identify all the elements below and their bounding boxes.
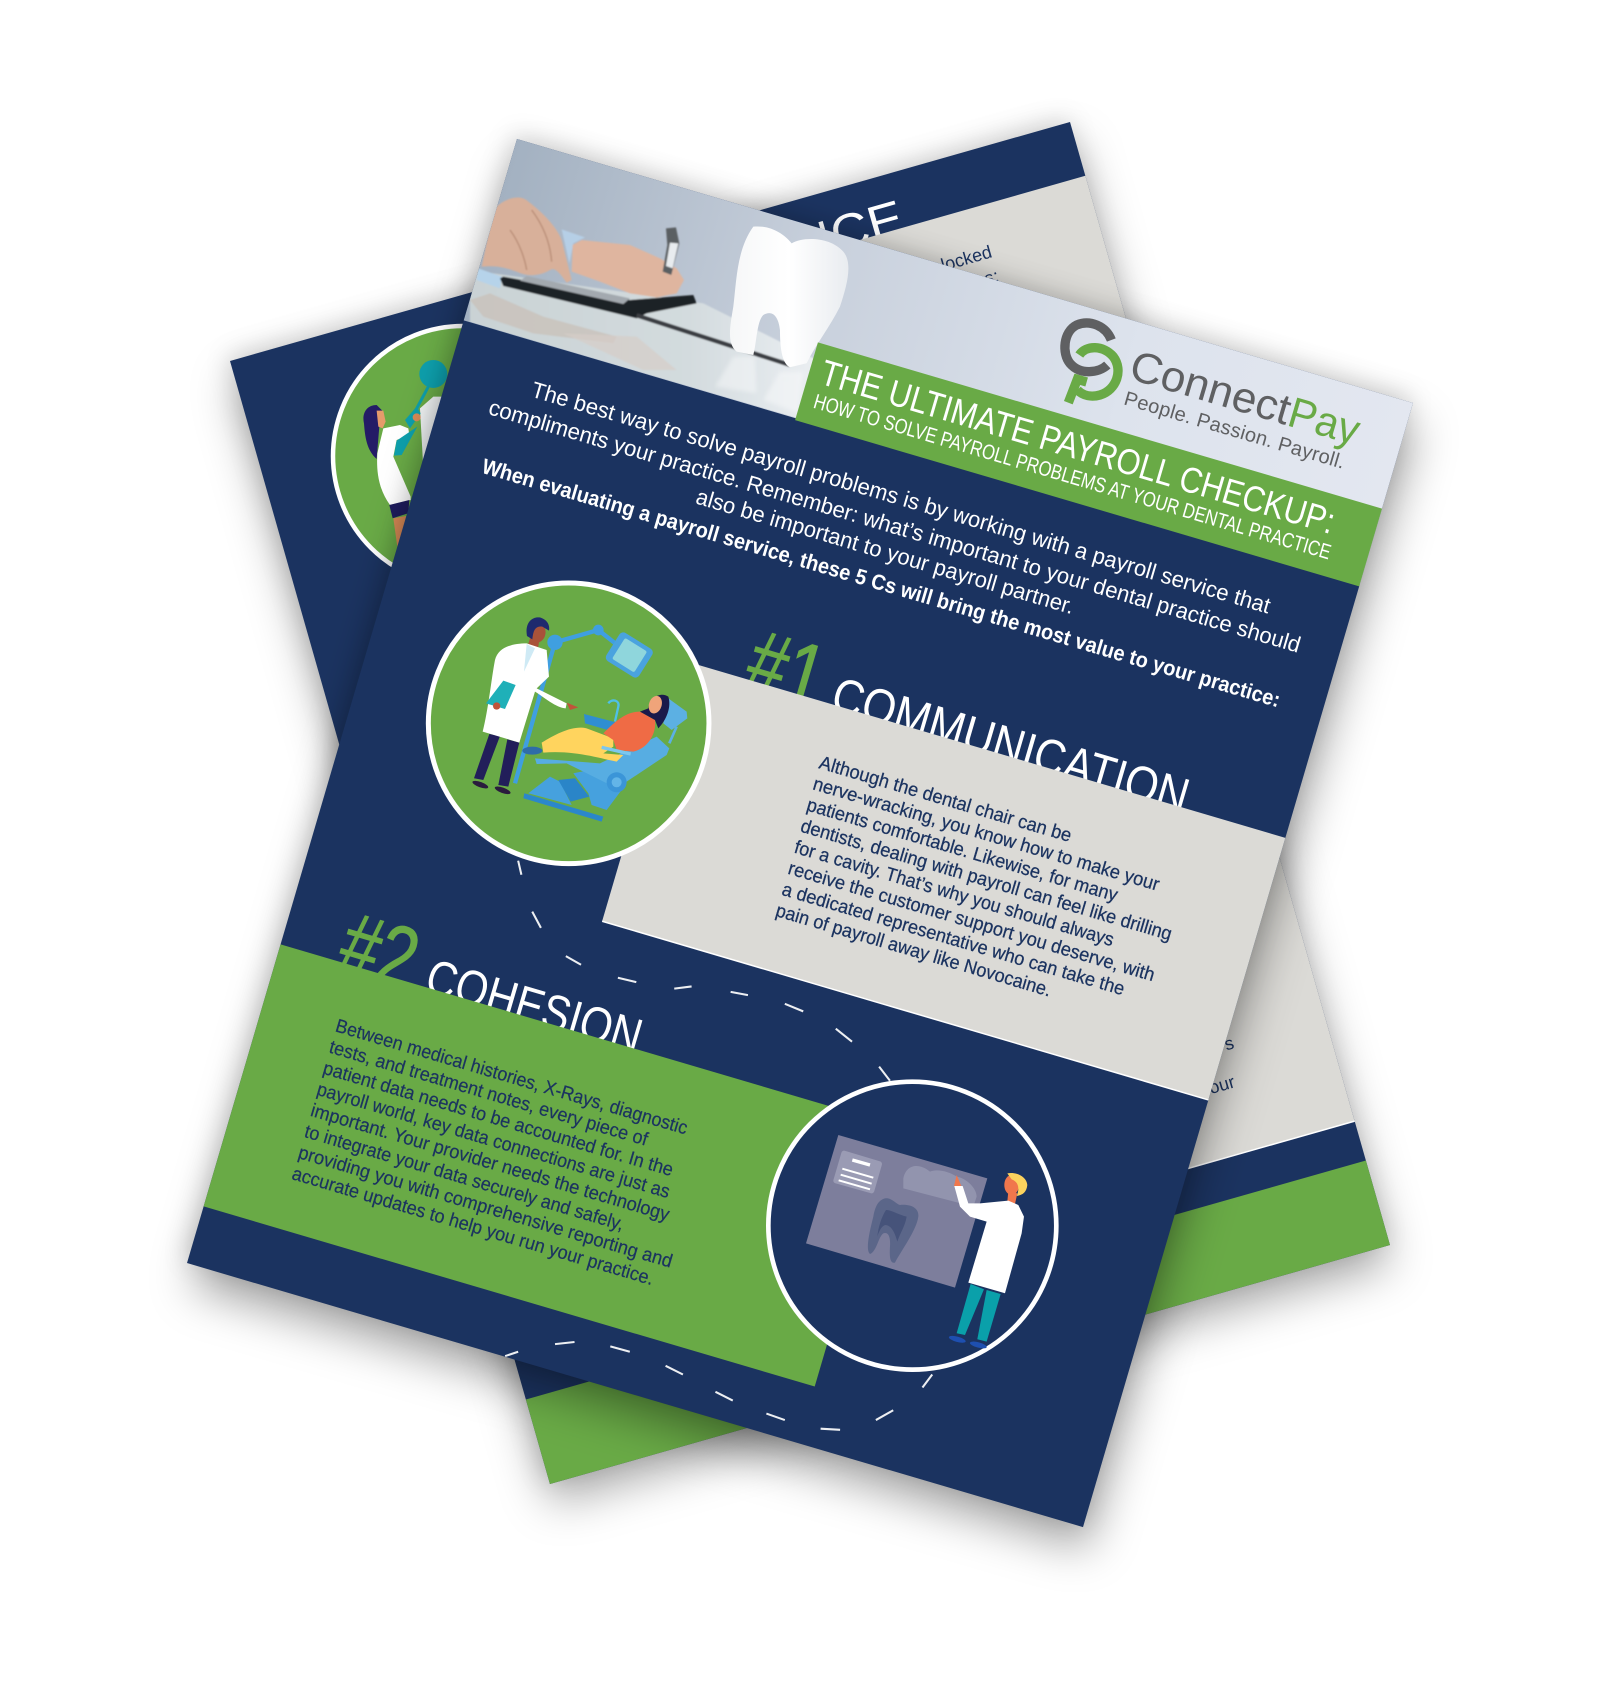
table and hands [470,197,814,418]
title band [795,342,1382,586]
x-ray board [806,1135,987,1288]
back sheet [230,122,1390,1484]
cohesion body text [290,1016,712,1294]
cohesion body text: important. Your provider needs the technology [308,1100,672,1226]
communication body text: dentists, dealing with payroll can feel like drilling [798,816,1174,945]
cohesion body text: accurate updates to help you run your practice. [290,1164,656,1290]
heading number 2: #2 [329,893,430,1009]
shadow: back sheet [227,118,1391,1504]
back sheet heading: COMPLIANCE [558,189,910,339]
cohesion body text: providing you with comprehensive reporting and [296,1142,675,1273]
header photo: hands and tooth [470,198,848,430]
cohesion body text: Between medical histories, X-Rays, diagnostic [333,1016,690,1139]
intro text: The best way to solve payroll problems is by working with a payroll service that [529,377,1274,619]
heading number 1: #1 [736,610,837,727]
heading communication: COMMUNICATION [826,666,1196,825]
logo: connectpay wordmark: Pay [1283,388,1366,455]
logo: connectpay wordmark [1125,342,1366,455]
back sheet text fragment: your [1198,1072,1237,1100]
cohesion body text: payroll world, key data connections are just as [314,1079,672,1203]
icon: dentist and patient circle [428,583,709,864]
front sheet base [187,139,1413,1527]
panel: cohesion [204,944,892,1386]
heading cohesion: COHESION [420,948,649,1065]
dental chair [515,625,687,822]
tooth [730,226,848,367]
back sheet gray panel [534,176,1355,1278]
back sheet text fragment: es: [973,266,1001,291]
cohesion body text: patient data needs to be accounted for. In the [321,1058,676,1181]
dashed connector below circle 2 [505,1342,932,1430]
communication body text: Although the dental chair can be [817,753,1074,847]
icon: x-ray viewer circle [768,1082,1056,1370]
tooth reflection [718,358,800,408]
communication body text [773,753,1193,1030]
panel: communication [602,659,1285,1100]
intro text: also be important to your payroll partner. [693,484,1077,619]
communication body text: receive the customer support you deserve, with [786,858,1157,986]
hygienist figure [363,360,480,547]
intro text: compliments your practice. Remember: what’s important to your dental practice should [486,395,1304,658]
communication body text: a dedicated representative who can take the [779,879,1127,1000]
back sheet text fragment: locked [939,242,994,275]
patient [522,694,669,762]
cohesion body text: tests, and treatment notes, every piece of [327,1037,651,1151]
header gradient [464,139,1413,584]
dentist viewing x-ray [948,1173,1027,1350]
communication body text: for a cavity. That’s why you should always [792,837,1116,951]
back sheet text fragment: s [1222,1033,1236,1054]
shadow: front sheet [185,134,1417,1550]
communication body text: nerve-wracking, you know how to make your [810,774,1162,896]
icon: back sheet circle with hygienist [333,326,593,586]
dentist [472,617,578,796]
logo: tagline: People. Passion. Payroll. [1122,388,1347,474]
intro text: When evaluating a payroll service, these 5 Cs will bring the most value to your practice: [479,454,1283,712]
dashed connector from circle 1 to circle 2 [505,861,932,1430]
back sheet green footer [526,1160,1390,1484]
icon: connectpay logo mark [1065,323,1118,403]
logo text [1119,342,1366,475]
subtitle: HOW TO SOLVE PAYROLL PROBLEMS AT YOUR DENTAL PRACTICE [811,390,1334,564]
cohesion body text: to integrate your data securely and safely, [302,1121,626,1235]
communication body text: pain of payroll away like Novocaine. [773,900,1054,1001]
title: THE ULTIMATE PAYROLL CHECKUP: [816,352,1340,542]
communication body text: patients comfortable. Likewise, for many [804,795,1120,906]
logo: connectpay wordmark: Connect [1125,342,1296,435]
front sheet page content [204,157,1408,1470]
